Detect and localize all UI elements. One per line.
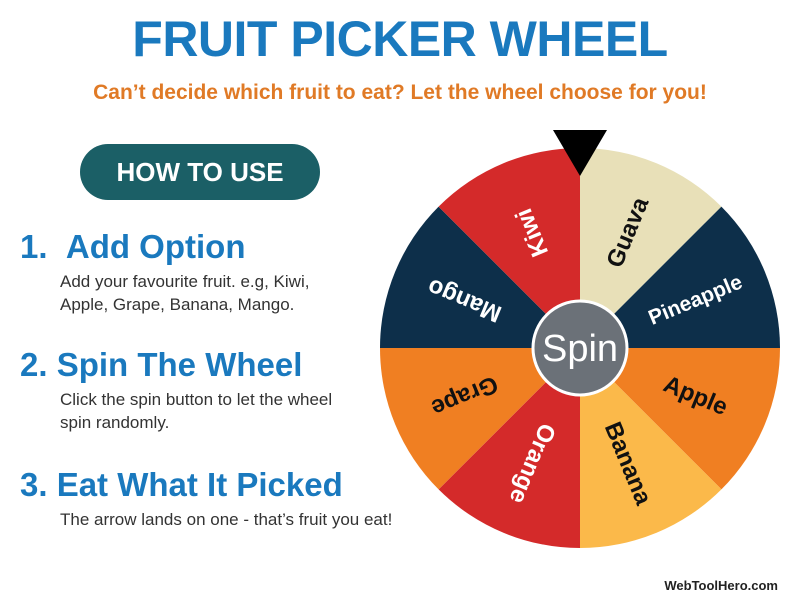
step 2: Click the spin button to let the wheel spin randomly.	[60, 390, 332, 432]
how to use button	[80, 144, 320, 200]
how to use button: HOW TO USE	[116, 157, 284, 187]
wheel: Pineapple	[645, 271, 746, 330]
step 1: 1. Add Option	[20, 228, 245, 265]
wheel: Grape	[427, 370, 502, 422]
pointer	[553, 130, 607, 176]
step 3: 3. Eat What It Picked	[20, 466, 343, 503]
wheel: Apple	[660, 371, 731, 421]
wheel: Banana	[599, 418, 657, 509]
step 1: Add your favourite fruit. e.g, Kiwi, Apple, Grape, Banana, Mango.	[60, 272, 309, 314]
wheel: Orange	[504, 420, 561, 507]
wheel: Kiwi	[510, 205, 554, 260]
step 2	[20, 346, 332, 432]
footer credit: WebToolHero.com	[664, 578, 778, 593]
step 2: 2. Spin The Wheel	[20, 346, 302, 383]
step 3: The arrow lands on one - that’s fruit you eat!	[60, 510, 392, 529]
wheel: Mango	[424, 273, 505, 327]
wheel: Spin	[542, 328, 618, 370]
title: FRUIT PICKER WHEEL	[132, 11, 668, 67]
subtitle: Can’t decide which fruit to eat? Let the wheel choose for you!	[93, 81, 707, 104]
wheel: Guava	[601, 193, 655, 272]
step 1	[20, 228, 309, 314]
step 3	[20, 466, 392, 529]
